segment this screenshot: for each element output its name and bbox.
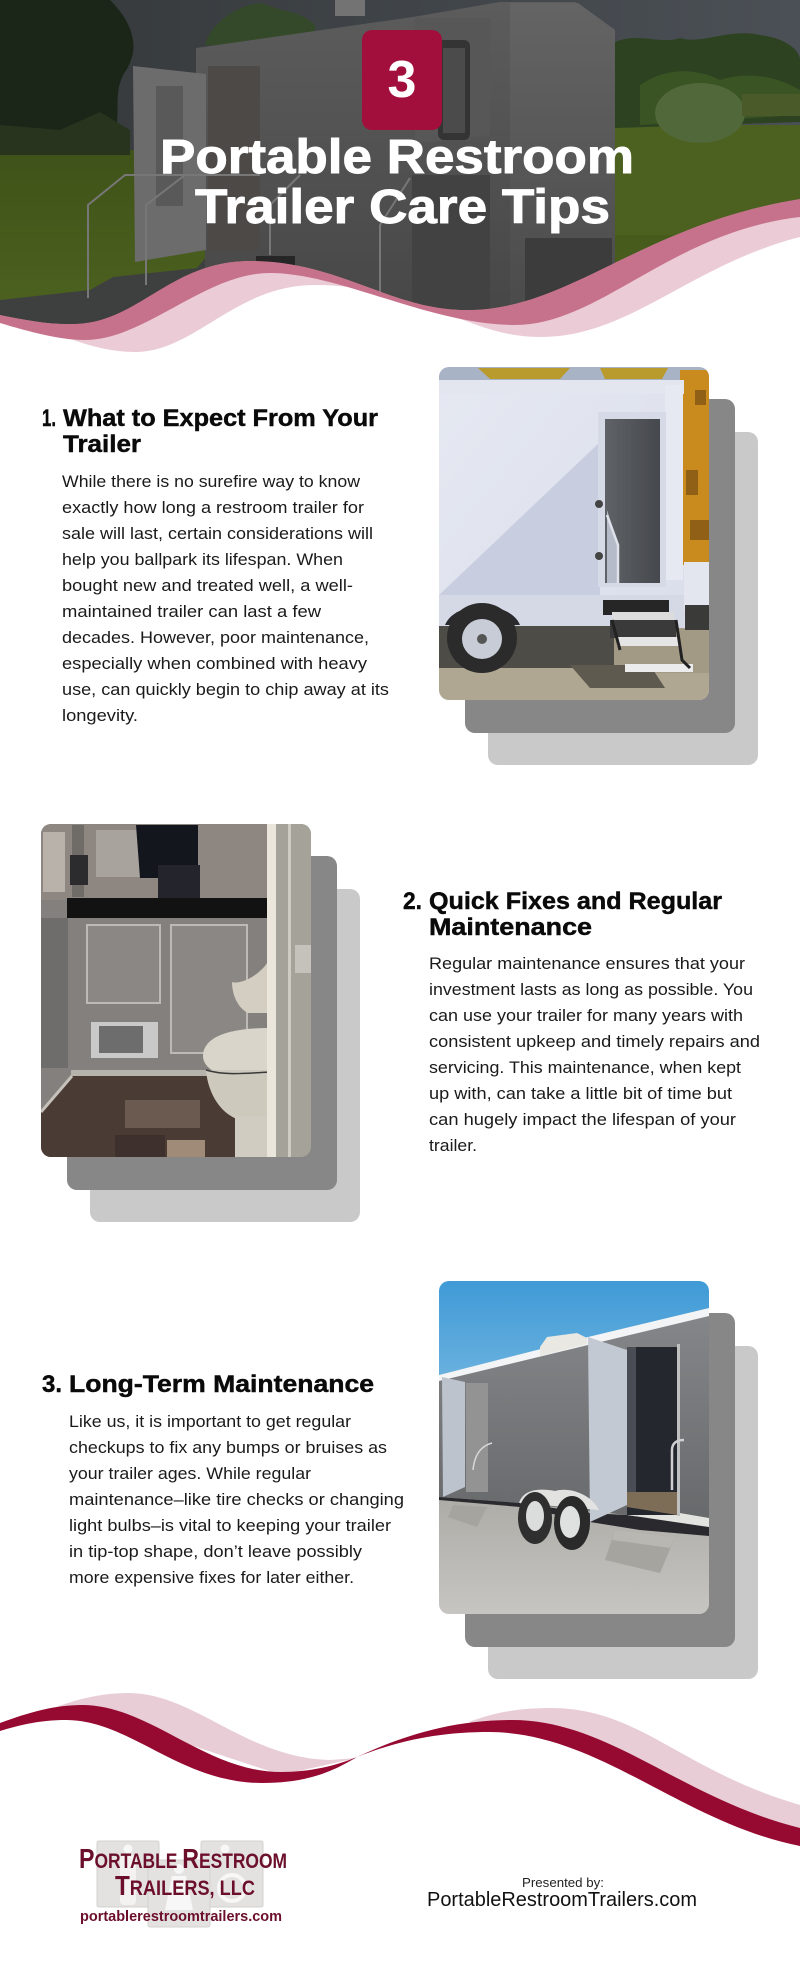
logo: Portable Restroom Trailers: [79, 1841, 287, 1927]
body 1: help you ballpark its lifespan. When: [62, 550, 343, 569]
body 2: Regular maintenance ensures that your: [429, 954, 745, 973]
body 2: can hugely impact the lifespan of your: [429, 1110, 736, 1129]
body 2: [429, 954, 760, 1155]
body 1: especially when combined with heavy: [62, 654, 368, 673]
number badge: 3: [388, 51, 416, 109]
heading 3: 3.: [42, 1371, 62, 1398]
body 3: checkups to fix any bumps or bruises as: [69, 1438, 387, 1457]
title: Trailer Care Tips: [195, 181, 610, 234]
body 1: sale will last, certain considerations will: [62, 524, 373, 543]
body 1: [62, 472, 389, 725]
body 1: bought new and treated well, a well-: [62, 576, 353, 595]
heading 1: [42, 405, 378, 458]
body 1: exactly how long a restroom trailer for: [62, 498, 364, 517]
bottom wave: light pink layer: [56, 1693, 800, 1835]
body 2: up with, can take a little bit of time but: [429, 1084, 732, 1103]
heading 1: 1.: [42, 405, 56, 432]
photo stack 3: grey trailer: [439, 1281, 758, 1679]
body 3: [69, 1412, 404, 1587]
heading 2: Maintenance: [429, 914, 592, 941]
body 3: maintenance–like tire checks or changing: [69, 1490, 404, 1509]
body 2: investment lasts as long as possible. You: [429, 980, 753, 999]
body 3: more expensive fixes for later either.: [69, 1568, 354, 1587]
heading 2: Quick Fixes and Regular: [429, 888, 722, 915]
footer: presented by: [427, 1875, 697, 1911]
logo wordmark: TRAILERS, LLC: [115, 1870, 255, 1901]
logo icons: restroom signs: [97, 1841, 263, 1927]
body 3: your trailer ages. While regular: [69, 1464, 311, 1483]
title: [160, 131, 634, 234]
heading 2: [403, 888, 722, 941]
heading 3: Long-Term Maintenance: [69, 1371, 374, 1398]
number badge: [362, 30, 442, 130]
section 2 text: [403, 888, 760, 1155]
body 1: longevity.: [62, 706, 138, 725]
footer: presented by: PortableRestroomTrailers.com: [427, 1889, 697, 1911]
body 3: Like us, it is important to get regular: [69, 1412, 351, 1431]
body 3: light bulbs–is vital to keeping your trailer: [69, 1516, 391, 1535]
footer: presented by: Presented by:: [522, 1875, 604, 1890]
logo wordmark: portablerestroomtrailers.com: [80, 1908, 282, 1925]
title: Portable Restroom: [160, 131, 634, 184]
heading 1: What to Expect From Your: [63, 405, 378, 432]
body 1: While there is no surefire way to know: [62, 472, 361, 491]
body 2: consistent upkeep and timely repairs and: [429, 1032, 760, 1051]
hero photo: trailer on lawn: [0, 0, 800, 345]
bottom wave: dark crimson ribbon: [0, 1705, 800, 1846]
logo wordmark: [79, 1843, 287, 1925]
photo stack 1: white trailer: [439, 367, 758, 765]
section 3 text: [42, 1371, 404, 1587]
body 1: use, can quickly begin to chip away at its: [62, 680, 389, 699]
top wave: light pink layer: [60, 0, 800, 352]
logo wordmark: PORTABLE RESTROOM: [79, 1843, 287, 1874]
body 2: can use your trailer for many years with: [429, 1006, 743, 1025]
photo stack 2: restroom interior: [41, 824, 360, 1222]
section 1 text: [42, 405, 389, 725]
heading 2: 2.: [403, 888, 422, 915]
body 1: maintained trailer can last a few: [62, 602, 322, 621]
body 3: in tip-top shape, don’t leave possibly: [69, 1542, 363, 1561]
trailer body: [196, 2, 576, 308]
body 2: trailer.: [429, 1136, 477, 1155]
body 2: servicing. This maintenance, when kept: [429, 1058, 741, 1077]
heading 1: Trailer: [63, 431, 141, 458]
body 1: decades. However, poor maintenance,: [62, 628, 369, 647]
top wave: main pink ribbon: [0, 199, 800, 340]
